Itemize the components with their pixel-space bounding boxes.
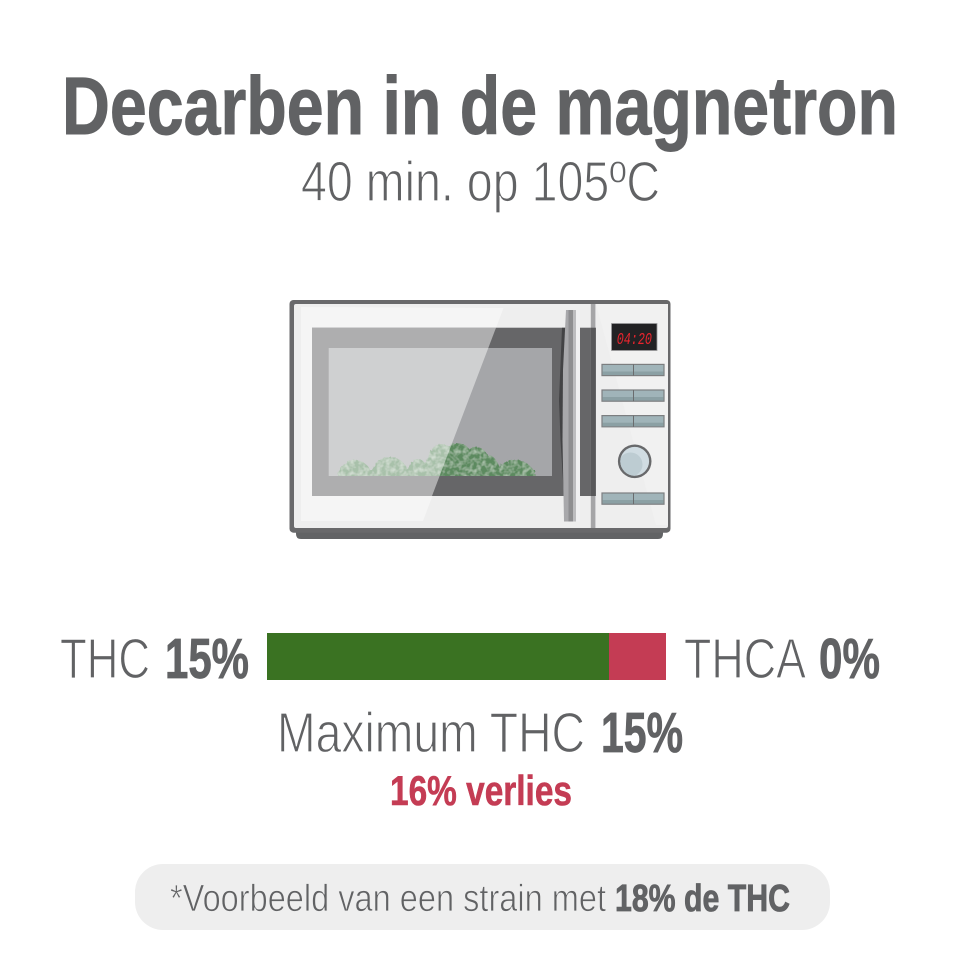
label: Maximum THC 15%: 15% bbox=[601, 701, 683, 765]
body glare bbox=[301, 307, 504, 521]
microwave foot bbox=[296, 530, 663, 539]
footnote pill: *Voorbeeld van een strain met bbox=[170, 878, 606, 920]
footnote pill bbox=[135, 864, 830, 930]
cannabis buds bbox=[338, 443, 536, 476]
label: THC 15%: 15% bbox=[165, 627, 249, 691]
handle shadow bbox=[559, 328, 568, 496]
display: 04:20 bbox=[617, 331, 652, 350]
knob bbox=[618, 444, 652, 478]
door glare bbox=[312, 328, 496, 496]
icon: microwave bbox=[290, 300, 670, 539]
window bbox=[329, 348, 552, 476]
label: THCA 0%: THCA bbox=[684, 627, 806, 691]
microwave body bbox=[290, 300, 670, 533]
display bbox=[612, 324, 657, 350]
door frame bbox=[312, 328, 596, 496]
right panel glare bbox=[596, 304, 668, 525]
door divider bbox=[591, 304, 595, 528]
buttons bbox=[602, 364, 664, 504]
label: Maximum THC 15%: Maximum THC bbox=[277, 701, 585, 765]
label: THC 15%: THC bbox=[60, 627, 150, 691]
label: THC 15% bbox=[60, 627, 249, 691]
label: 16% verlies: 16% verlies bbox=[390, 767, 572, 814]
label: THCA 0%: 0% bbox=[819, 627, 880, 691]
bar chart: THC vs THCA bbox=[267, 633, 666, 680]
door handle bbox=[562, 310, 580, 522]
footnote pill: 18% de THC bbox=[615, 878, 790, 920]
subtitle: 40 min. op 105ºC bbox=[301, 150, 660, 214]
